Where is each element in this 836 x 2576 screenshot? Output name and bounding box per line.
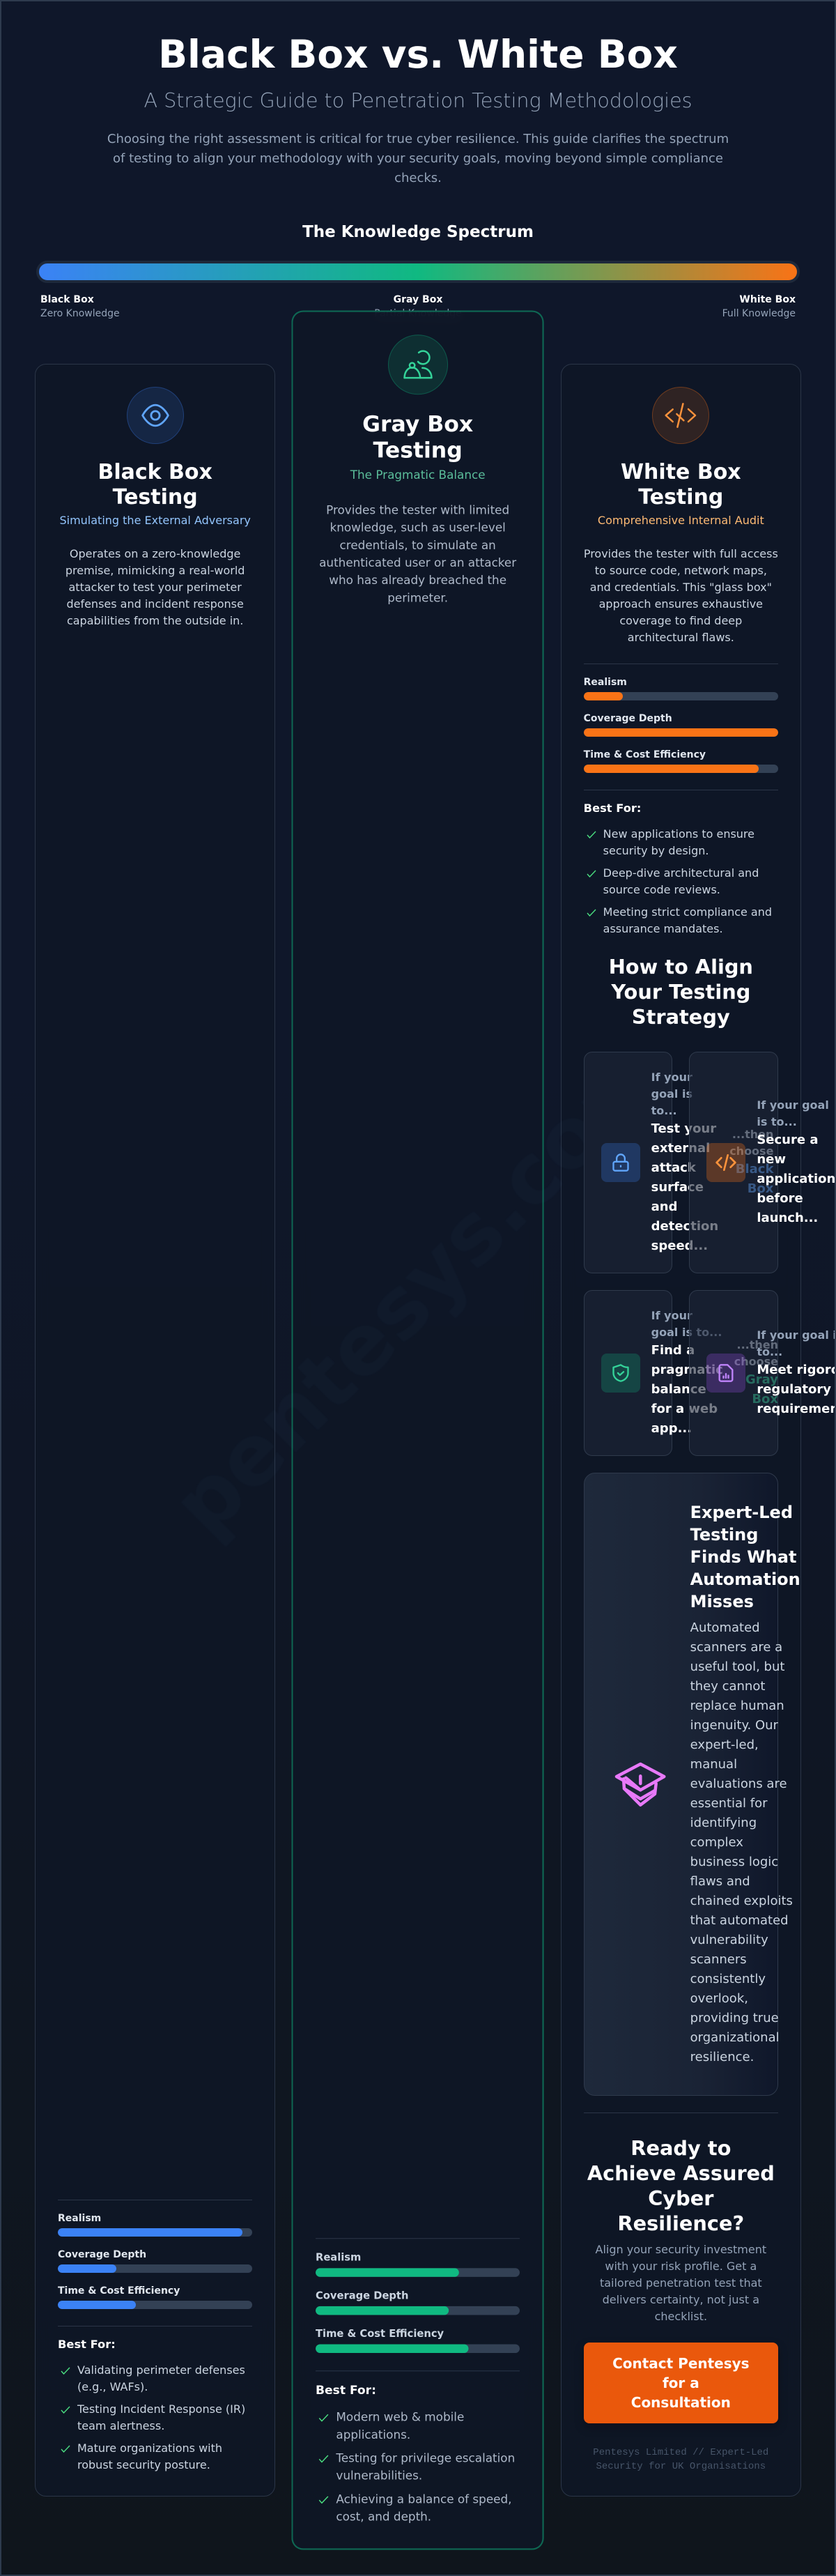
goal text: Find a pragmatic balance for a web app... [651,1343,723,1436]
spectrum label: white box: White Box [739,294,796,305]
best for list: New applications to ensure security by design. [603,827,754,857]
cta button [584,2343,778,2423]
icon: eye [127,387,184,444]
best for list [61,2363,245,2471]
rating bars: Coverage Depth [584,713,672,724]
spectrum label: white box [722,294,796,319]
card: secure a new application [689,1052,778,1273]
icon: shield check [601,1354,640,1393]
icon: file chart [706,1354,745,1393]
best for list: Achieving a balance of speed, cost, and depth. [336,2492,512,2524]
best for heading: Best For: [316,2383,376,2397]
rating bars: Realism [316,2252,362,2264]
recommendation: ...then choose [734,1338,778,1368]
cta button: Contact Pentesys for a Consultation [612,2355,750,2411]
goal text [757,1328,836,1416]
call to action [584,2113,778,2474]
best for list: Testing Incident Response (IR) team alertness. [77,2402,245,2432]
tagline: Comprehensive Internal Audit [598,514,764,527]
rating bars: Realism [58,2213,101,2224]
icon: code [652,387,709,444]
recommendation: Black Box [736,1162,773,1196]
recommendation: ...then choose [729,1128,773,1158]
spectrum label: black box [40,294,120,319]
recommendation: Gray Box [745,1372,778,1406]
recommendation [734,1338,778,1406]
heading: Gray Box Testing [362,411,474,463]
expert text: Automated scanners are a useful tool, but they cannot replace human ingenuity. Our expert-led, manual evaluations are essential for identifying complex business logic flaws and chained exploits that automated vulnerability scanners consistently overlook, providing true organizational resilience. [690,1620,793,2064]
recommendation [729,1128,774,1196]
best for heading: Best For: [584,802,641,815]
rating bars: Coverage Depth [58,2249,146,2260]
rating bars [58,2200,252,2326]
spectrum label: black box: Black Box [40,294,94,305]
tagline: Simulating the External Adversary [59,514,251,527]
spectrum heading: The Knowledge Spectrum [302,223,534,241]
goal text: Secure a new application before launch... [757,1133,835,1225]
heading: White Box Testing [621,460,741,509]
expert text: Expert-Led Testing Finds What Automation Misses [690,1503,800,1611]
panel: gray box testing [292,311,544,2550]
description: Operates on a zero-knowledge premise, mimicking a real-world attacker to test your perimeter defenses and incident response capabilities from the outside in. [65,547,245,627]
rating bars [316,2238,520,2371]
icon: gray box [388,335,448,394]
watermark: pentesys.com [155,1024,684,1554]
spectrum label: gray box: Partial Knowledge [374,308,462,319]
tagline: The Pragmatic Balance [350,468,486,482]
spectrum label: gray box: Gray Box [394,294,442,305]
goal text: If your goal is to... [651,1309,722,1339]
card: find a pragmatic balance [584,1290,672,1456]
spectrum label: gray box [374,294,462,319]
rating bars [584,664,778,790]
title: Black Box vs. White Box [158,32,678,77]
card: test external attack surface [584,1052,672,1273]
goal text: Test your external attack surface and detection speed... [651,1121,718,1253]
footer: Pentesys Limited // Expert-Led Security for UK Organisations [593,2447,768,2472]
icon: code [706,1143,745,1182]
cta text: Align your security investment with your risk profile. Get a tailored penetration test that delivers certainty, not just a checklist. [596,2243,766,2323]
panel: white box testing [561,364,801,2497]
goal text: If your goal is to... [757,1098,829,1128]
rating bars: Coverage Depth [316,2290,409,2302]
icon: lock [601,1143,640,1182]
panel: expert-led testing [584,1473,778,2096]
best for list: Validating perimeter defenses (e.g., WAFs). [77,2363,245,2393]
cta heading: Ready to Achieve Assured Cyber Resilience? [587,2136,775,2235]
spectrum gradient bar [36,261,800,283]
heading: Black Box Testing [98,460,212,509]
panel: black box testing [35,364,275,2497]
spectrum label: white box: Full Knowledge [722,308,796,319]
strategy cards [584,1052,836,1456]
best for list: Testing for privilege escalation vulnerabilities. [336,2451,516,2483]
description: Provides the tester with limited knowledge, such as user-level credentials, to simulate an authenticated user or an attacker who has already breached the perimeter. [319,503,517,605]
best for list [587,827,772,935]
best for list: Modern web & mobile applications. [336,2410,465,2441]
best for list: Meeting strict compliance and assurance mandates. [603,905,772,935]
best for list [319,2410,516,2524]
rating bars: Realism [584,677,627,688]
rating bars: Time & Cost Efficiency [584,749,706,760]
goal text: If your goal is to... [651,1071,692,1117]
card: meet regulatory requirements [689,1290,778,1456]
rating bars: Time & Cost Efficiency [316,2328,444,2340]
strategy heading: How to Align Your Testing Strategy [609,955,753,1029]
icon: graduation cap [614,1762,666,1807]
rating bars: Time & Cost Efficiency [58,2285,180,2297]
best for list: Mature organizations with robust security posture. [77,2441,222,2471]
best for heading: Best For: [58,2338,116,2351]
spectrum label: black box: Zero Knowledge [40,308,120,319]
intro text: Choosing the right assessment is critical for true cyber resilience. This guide clarifies the spectrum of testing to align your methodology with your security goals, moving beyond simple compliance checks. [107,132,729,185]
best for list: Deep-dive architectural and source code reviews. [603,866,759,896]
description: Provides the tester with full access to source code, network maps, and credentials. This "glass box" approach ensures exhaustive coverage to find deep architectural flaws. [584,547,778,644]
subtitle: A Strategic Guide to Penetration Testing Methodologies [144,89,692,112]
